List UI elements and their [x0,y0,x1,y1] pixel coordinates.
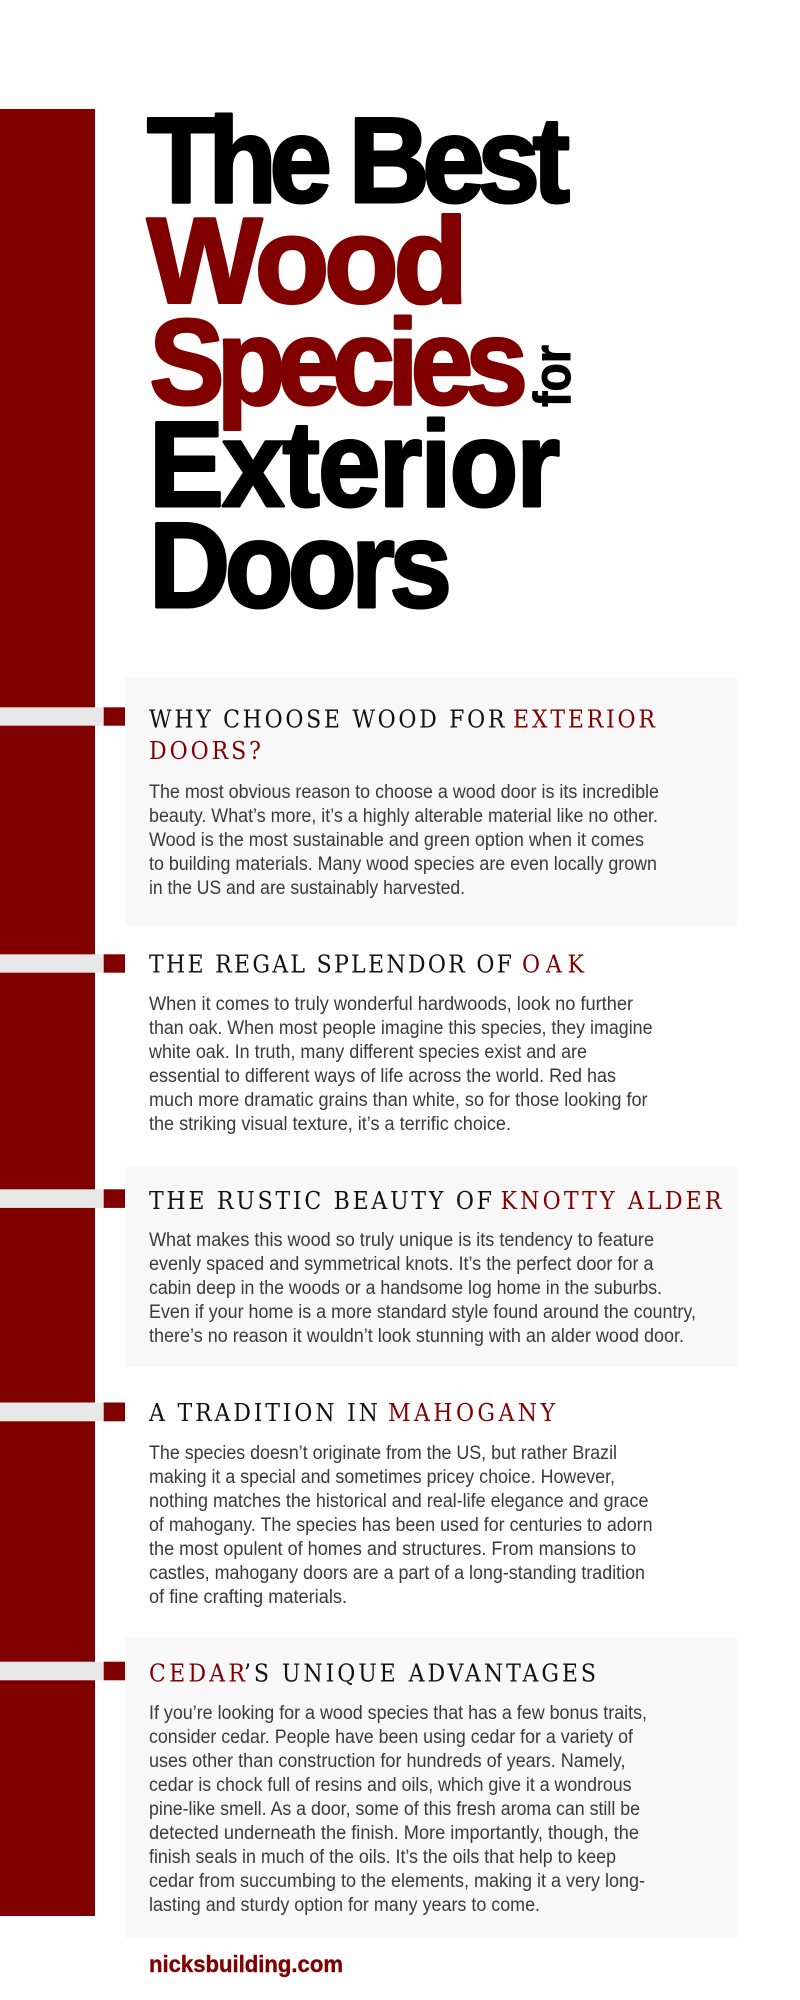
body text: oak: When it comes to truly wonderful hardwoods, look no further [149,994,634,1015]
heading: why choose wood: EXTERIOR [513,706,656,734]
heading: why choose wood: WHY CHOOSE WOOD FOR [149,706,506,734]
body text: why choose wood: in the US and are sustainably harvested. [149,878,465,899]
body text: oak [148,994,652,1135]
heading: why choose wood [149,706,656,765]
title: Species [150,294,528,430]
heading: oak: OAK [522,951,585,979]
body text: knotty alder: Even if your home is a more standard style found around the country, [149,1302,696,1323]
body text: mahogany: the most opulent of homes and structures. From mansions to [149,1539,636,1560]
body text: cedar: lasting and sturdy option for many years to come. [149,1895,540,1916]
heading: cedar: CEDAR [149,1660,246,1688]
body text: cedar [149,1703,647,1916]
body text: knotty alder: evenly spaced and symmetrical knots. It’s the perfect door for a [149,1254,654,1275]
heading: knotty alder: THE RUSTIC BEAUTY OF [149,1187,492,1215]
heading: knotty alder [149,1187,723,1215]
body text: oak: than oak. When most people imagine this species, they imagine [149,1018,652,1039]
panel: why choose wood [0,677,737,925]
footer website: nicksbuilding.com [149,1951,343,1977]
heading: mahogany: MAHOGANY [388,1399,556,1427]
body text: why choose wood: Wood is the most sustainable and green option when it comes [149,830,644,851]
panel: cedar's unique advantages [0,1637,737,1938]
heading: why choose wood: DOORS? [149,737,261,765]
body text: oak: much more dramatic grains than white, so for those looking for [149,1090,648,1111]
body text: mahogany: The species doesn’t originate from the US, but rather Brazil [149,1443,617,1464]
body text: mahogany: making it a special and sometimes pricey choice. However, [149,1467,615,1488]
title: Exterior [149,396,560,532]
heading: oak: THE REGAL SPLENDOR OF [149,951,512,979]
body text: cedar: cedar is chock full of resins and oils, which give it a wondrous [149,1775,632,1796]
title [147,92,582,633]
left sidebar bar [0,109,95,1916]
body text: knotty alder [149,1230,696,1347]
body text: why choose wood [149,782,659,899]
body text: cedar: uses other than construction for hundreds of years. Namely, [149,1751,626,1772]
title: The Best [147,92,570,228]
heading: cedar: ’S UNIQUE ADVANTAGES [244,1660,596,1688]
body text: cedar: If you’re looking for a wood species that has a few bonus traits, [149,1703,647,1724]
body text: mahogany: of fine crafting materials. [149,1587,347,1608]
body text: cedar: pine-like smell. As a door, some of this fresh aroma can still be [149,1799,640,1820]
title: for [524,345,582,407]
panel: rustic beauty of knotty alder [0,1167,737,1367]
body text: why choose wood: beauty. What’s more, it’s a highly alterable material like no other. [149,806,658,827]
body text: cedar: finish seals in much of the oils. It’s the oils that help to keep [149,1847,616,1868]
body text: cedar: detected underneath the finish. More importantly, though, the [149,1823,639,1844]
body text: mahogany: castles, mahogany doors are a part of a long-standing tradition [149,1563,645,1584]
body text: mahogany: of mahogany. The species has been used for centuries to adorn [149,1515,652,1536]
body text: why choose wood: to building materials. Many wood species are even locally grown [149,854,657,875]
body text: mahogany: nothing matches the historical and real-life elegance and grace [149,1491,648,1512]
title: Wood [147,192,468,328]
body text: oak: essential to different ways of life across the world. Red has [149,1066,616,1087]
heading: mahogany [148,1399,556,1427]
body text: knotty alder: cabin deep in the woods or a handsome log home in the suburbs. [149,1278,662,1299]
body text: oak: the striking visual texture, it’s a terrific choice. [149,1114,511,1135]
body text: cedar: cedar from succumbing to the elements, making it a very long- [149,1871,645,1892]
body text: oak: white oak. In truth, many different species exist and are [148,1042,587,1063]
panel: tradition in mahogany [0,1399,652,1608]
body text: cedar: consider cedar. People have been using cedar for a variety of [149,1727,634,1748]
heading: knotty alder: KNOTTY ALDER [500,1187,723,1215]
body text: knotty alder: there’s no reason it wouldn’t look stunning with an alder wood door. [149,1326,684,1347]
title: Doors [149,497,452,633]
panel: regal splendor of oak [0,951,652,1135]
body text: mahogany [149,1443,652,1608]
heading: mahogany: A TRADITION IN [148,1399,378,1427]
body text: why choose wood: The most obvious reason to choose a wood door is its incredible [149,782,659,803]
body text: knotty alder: What makes this wood so truly unique is its tendency to feature [149,1230,654,1251]
